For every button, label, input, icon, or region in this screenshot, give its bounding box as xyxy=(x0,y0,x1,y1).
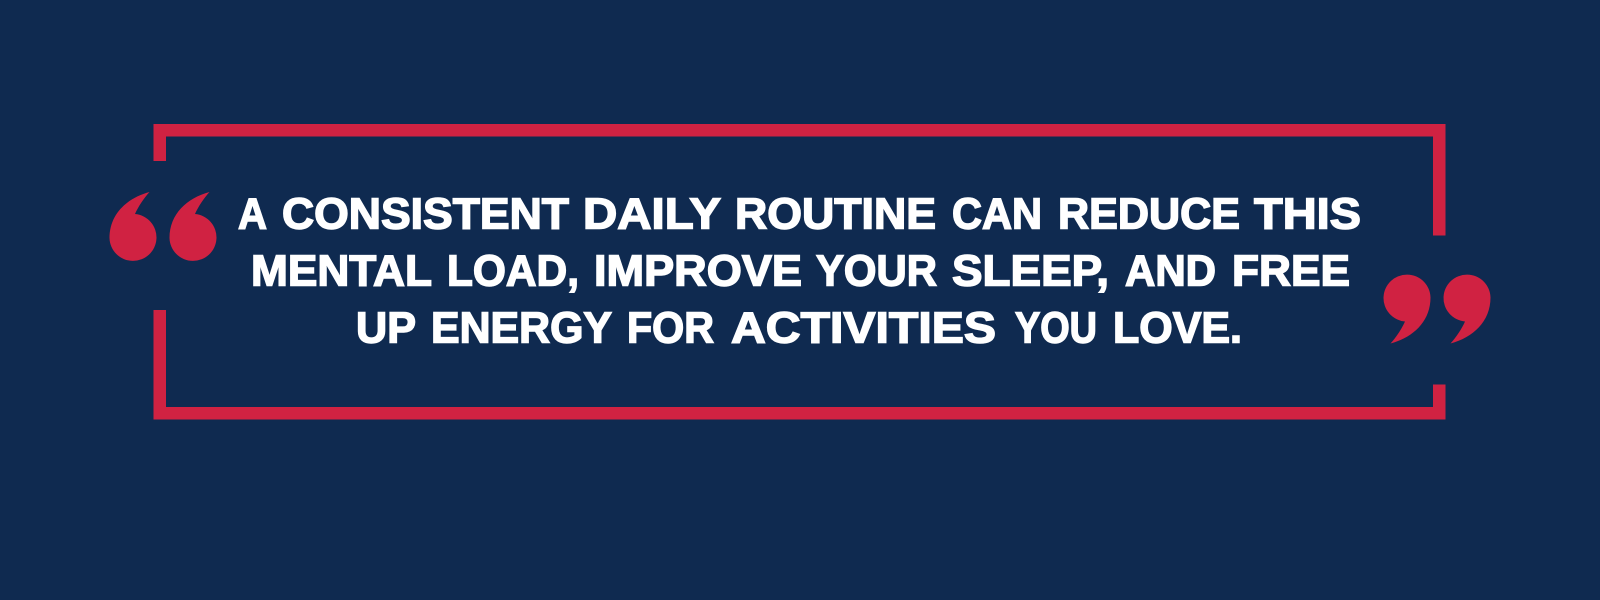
line 2: FREE xyxy=(1232,246,1350,295)
line 3 xyxy=(356,304,1242,353)
icon: opening quotation mark xyxy=(110,192,216,261)
line 1: ROUTINE xyxy=(735,190,936,239)
line 2 xyxy=(251,246,1350,295)
line 3: YOU xyxy=(1015,304,1097,353)
line 3: UP xyxy=(356,304,416,353)
line 2: AND xyxy=(1125,246,1216,295)
line 3: ENERGY xyxy=(431,304,612,353)
line 1: DAILY xyxy=(583,190,721,239)
line 1: REDUCE xyxy=(1058,190,1240,239)
line 2: LOAD, xyxy=(447,246,579,295)
line 2: YOUR xyxy=(816,246,937,295)
red bracket frame xyxy=(154,124,1446,420)
line 2: IMPROVE xyxy=(594,246,802,295)
line 1: CONSISTENT xyxy=(282,190,569,239)
quote text xyxy=(238,190,1361,353)
line 3: FOR xyxy=(627,304,714,353)
line 1 xyxy=(238,190,1361,239)
line 1: THIS xyxy=(1254,190,1361,239)
line 3: LOVE. xyxy=(1113,304,1242,353)
line 1: CAN xyxy=(952,190,1042,239)
line 3: ACTIVITIES xyxy=(731,304,996,353)
line 1: A xyxy=(238,190,267,239)
icon: closing quotation mark xyxy=(1384,275,1490,344)
line 2: MENTAL xyxy=(251,246,432,295)
line 2: SLEEP, xyxy=(952,246,1109,295)
